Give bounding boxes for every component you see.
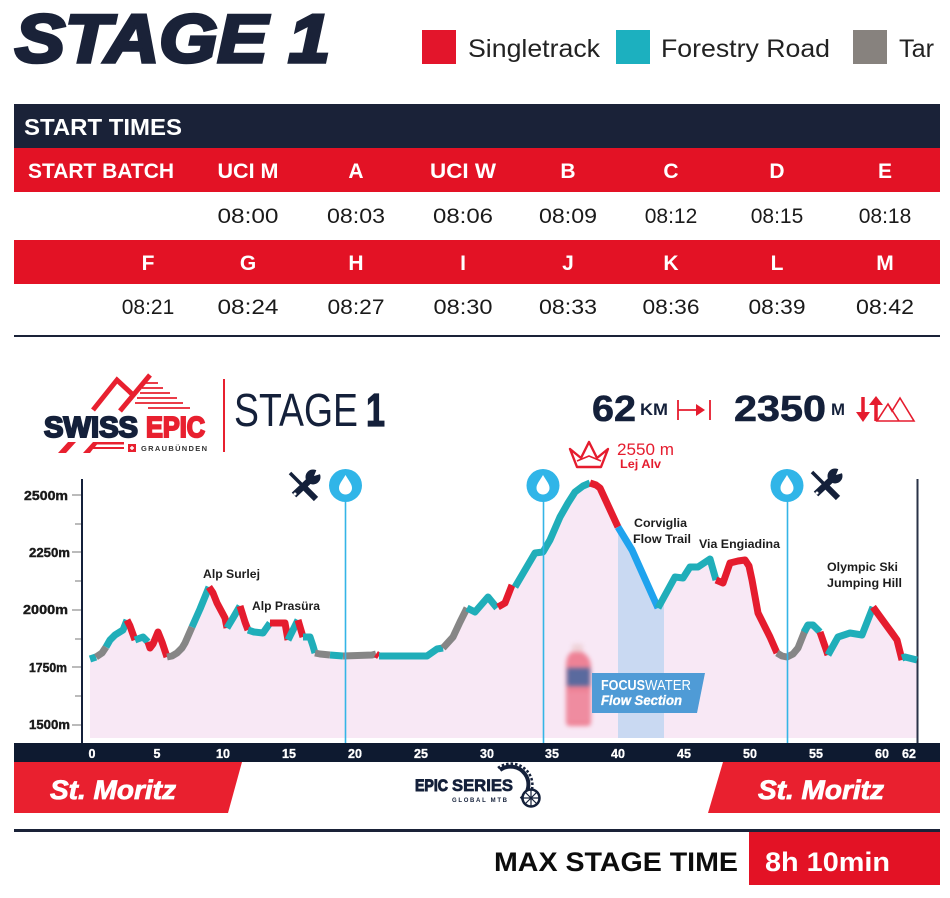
distance bar: 0 [89,747,96,761]
distance bar: 60 [875,747,889,761]
distance bar: 35 [545,747,559,761]
place labels: Flow Trail [633,532,691,546]
start times table: G [240,252,256,275]
start times table: L [771,252,784,275]
distance bar: 20 [348,747,362,761]
start times table: START TIMES [24,114,182,140]
climbing stat: 2350 [734,388,826,429]
start times table [14,104,940,337]
distance bar: 30 [480,747,494,761]
icon: crown with peak height: Lej Alv [620,459,662,471]
legend [422,30,934,64]
stage heading: 1 [366,384,385,436]
start times table: 08:42 [856,296,914,319]
start times table: 08:39 [748,296,806,319]
start times table: 08:27 [328,296,384,319]
start times table: START BATCH [28,160,174,183]
profile area [90,483,917,738]
place labels: Corviglia [634,516,687,530]
max stage time value [749,832,940,885]
icon: water 2 [526,469,560,502]
elevation chart [14,465,940,762]
start times table: A [348,160,364,183]
distance bar: 50 [743,747,757,761]
legend: Tar [899,35,934,63]
icon: water 1 [329,469,362,502]
start times table: I [460,252,466,275]
logo: Epic Series [415,764,540,807]
flow section callout: Flow Section [601,693,682,708]
start times table: 08:21 [122,296,174,319]
distance bar: 62 [902,747,916,761]
distance bar [14,743,940,762]
logo: Epic Series: GLOBAL MTB [452,798,508,804]
distance bar: 5 [154,747,161,761]
y axis labels: 2500m [24,489,68,503]
flow section callout [592,673,705,713]
max stage time label: MAX STAGE TIME [494,847,738,877]
distance bar: 45 [677,747,691,761]
distance stat: 62 [592,388,636,429]
logo: Swiss Epic: SWISS [44,412,138,444]
start times table: J [562,252,574,275]
start times table: 08:09 [539,205,597,228]
start banner: St. Moritz [50,775,177,805]
distance bar: 55 [809,747,823,761]
icon: crown with peak height [570,440,674,471]
start times table: M [876,252,894,275]
icon: crown with peak height: 2550 m [617,440,674,459]
distance bar: 40 [611,747,625,761]
start times table: 08:18 [859,205,911,228]
water point lines [346,500,788,743]
start times table: C [663,160,679,183]
start times table: E [878,160,892,183]
start banner [14,762,242,813]
start times table: UCI M [218,160,278,183]
place labels: Via Engiadina [699,537,780,551]
y axis labels: 2250m [29,546,70,560]
flow section callout: WATER [645,678,691,694]
start times table: 08:30 [434,296,492,319]
start times table: 08:33 [539,296,597,319]
distance stat: KM [640,400,668,419]
finish banner: St. Moritz [758,775,885,805]
start times table: B [560,160,576,183]
profile line [90,483,917,660]
start times table: 08:06 [433,205,493,228]
y axis labels: 2000m [23,603,68,617]
icon: water 3 [770,469,804,502]
max stage time value: 8h 10min [765,847,890,877]
logo: Swiss Epic: EPIC [146,412,205,444]
start times table: 08:00 [218,205,278,228]
divider [14,829,940,832]
start times table: H [348,252,364,275]
place labels: Alp Surlej [203,567,260,581]
climbing stat: M [831,400,845,419]
start times table: 08:12 [645,205,697,228]
icon: tools right [812,465,846,498]
flow section callout: FOCUS [601,678,645,694]
start times table: K [663,252,679,275]
y axis [72,495,82,725]
right axis [916,479,918,743]
logo: Epic Series: EPIC [415,776,448,795]
distance bar: 25 [414,747,428,761]
icon: tools left [290,466,324,499]
title: STAGE 1 [15,1,330,77]
flow section band [618,527,664,738]
place labels: Jumping Hill [827,576,902,590]
distance stat [592,388,710,429]
icon: water bottle [566,644,591,726]
y axis labels: 1500m [29,718,70,732]
y axis labels [23,489,70,732]
y axis labels: 1750m [29,661,67,675]
stage heading: STAGE [234,384,358,436]
start times table: 08:15 [751,205,803,228]
distance bar: 10 [216,747,230,761]
start times table: 08:03 [327,205,385,228]
divider [223,379,225,452]
logo: Swiss Epic: GRAUBÜNDEN [141,444,207,453]
climbing stat [734,388,914,429]
place labels: Alp Prasüra [252,599,320,613]
logo: Swiss Epic [44,375,207,453]
finish banner [708,762,940,813]
legend: Singletrack [468,35,601,63]
logo: Epic Series: SERIES [452,776,513,795]
start times table: F [142,252,155,275]
start times table: D [769,160,785,183]
start times table: UCI W [430,160,496,183]
legend: Forestry Road [661,35,830,63]
start times table: 08:24 [218,296,279,319]
place labels [203,516,902,613]
distance bar: 15 [282,747,296,761]
start times table: 08:36 [642,296,700,319]
place labels: Olympic Ski [827,560,898,574]
